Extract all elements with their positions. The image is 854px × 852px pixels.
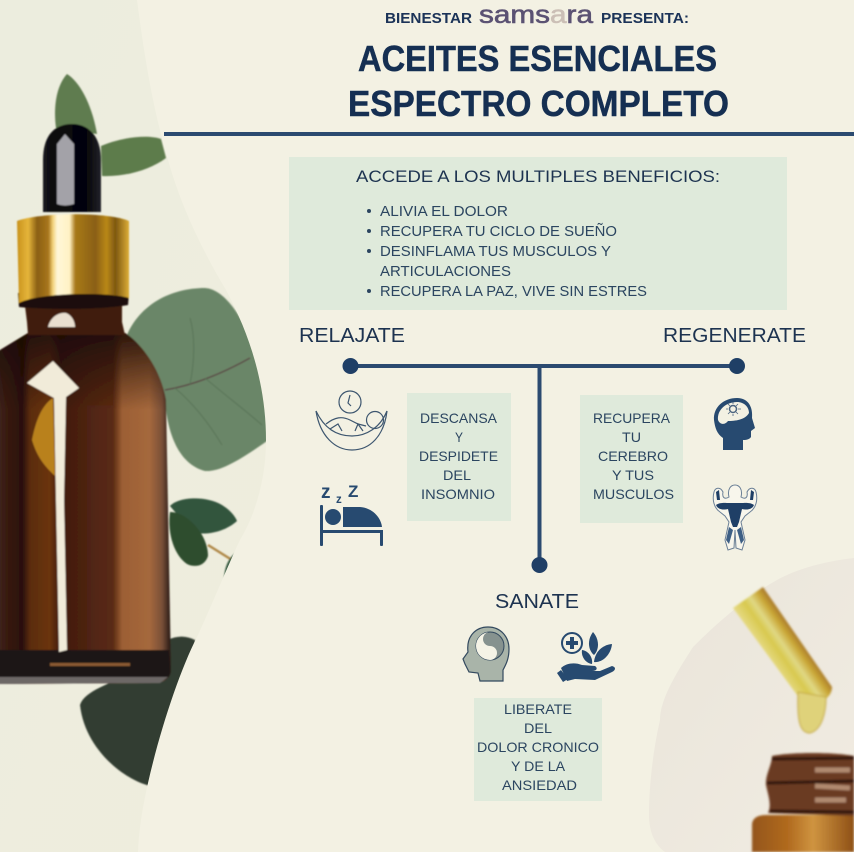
panel: recupera: TU [622,429,641,445]
leaves: small dark sprig [169,498,240,580]
title [348,38,729,124]
panel: recupera: MUSCULOS [593,486,674,502]
panel: liberate: LIBERATE [504,701,572,717]
amber bottle [752,753,854,852]
header line: PRESENTA: [601,10,689,27]
leaf: right of cap [101,137,166,176]
panel: recupera [580,395,683,523]
header line [385,1,689,29]
branching connector [342,358,745,573]
panel: descansa: INSOMNIO [421,486,495,502]
panel: recupera: Y TUS [612,467,654,483]
icon: muscular body [713,485,757,550]
panel: liberate: ANSIEDAD [502,777,577,793]
header line: sams ara [479,1,593,29]
benefits list: ARTICULACIONES [380,264,511,280]
panel: liberate: DOLOR CRONICO [477,739,599,755]
panel: liberate [474,698,602,801]
bottle yellow reflection [32,398,55,476]
gold collar [17,214,129,303]
leaf: large eucalyptus [127,288,268,471]
panel: descansa [407,393,511,521]
panel: descansa: DEL [443,467,471,483]
benefits list: RECUPERA LA PAZ, VIVE SIN ESTRES [380,284,647,300]
panel: liberate: Y DE LA [511,758,566,774]
title rule [164,132,854,136]
icon: yin yang head [463,627,509,681]
panel: descansa: DESPIDETE [419,448,498,464]
icon: sleeping person in bed [320,482,383,546]
bottle body [0,333,171,684]
panel: benefits [289,157,787,310]
benefits list: DESINFLAMA TUS MUSCULOS Y [380,244,611,260]
icon: hand with plus and leaves [557,632,615,682]
leaf: top [55,74,97,134]
icon: head with glowing brain [714,398,755,450]
heading: sanate: SANATE [495,591,579,613]
photo: dropper bottle with eucalyptus leaves [0,72,266,786]
bottle base [0,650,170,683]
header line: BIENESTAR [385,10,472,27]
icon: sleeping person in bed: z [336,494,342,506]
heading: regenerate: REGENERATE [663,325,806,347]
benefits list [367,204,647,300]
icon: sleeping person in bed: Z [348,482,358,501]
bottle neck [18,289,129,335]
black dropper cap [43,124,101,212]
panel: descansa: DESCANSA [420,410,498,426]
panel: liberate: DEL [524,720,552,736]
panel: recupera: CEREBRO [598,448,668,464]
bottle shoulder shading [0,333,166,410]
bottle highlight [27,361,79,652]
benefits list: RECUPERA TU CICLO DE SUEÑO [380,223,617,240]
dropper tube [733,587,832,700]
icon: hammock with clock [316,391,387,450]
panel: descansa: Y [455,429,464,445]
benefits list: ALIVIA EL DOLOR [380,204,508,220]
benefits heading: ACCEDE A LOS MULTIPLES BENEFICIOS: [356,167,720,186]
oil drop [798,692,826,733]
title: ACEITES ESENCIALES [358,38,717,79]
photo: oil dropper and amber bottle [640,550,854,852]
title: ESPECTRO COMPLETO [348,83,729,124]
icon: sleeping person in bed: z [321,482,330,503]
panel: recupera: RECUPERA [593,410,671,426]
heading: relajate: RELAJATE [299,325,405,347]
leaf: dark lower eucalyptus [80,637,200,786]
